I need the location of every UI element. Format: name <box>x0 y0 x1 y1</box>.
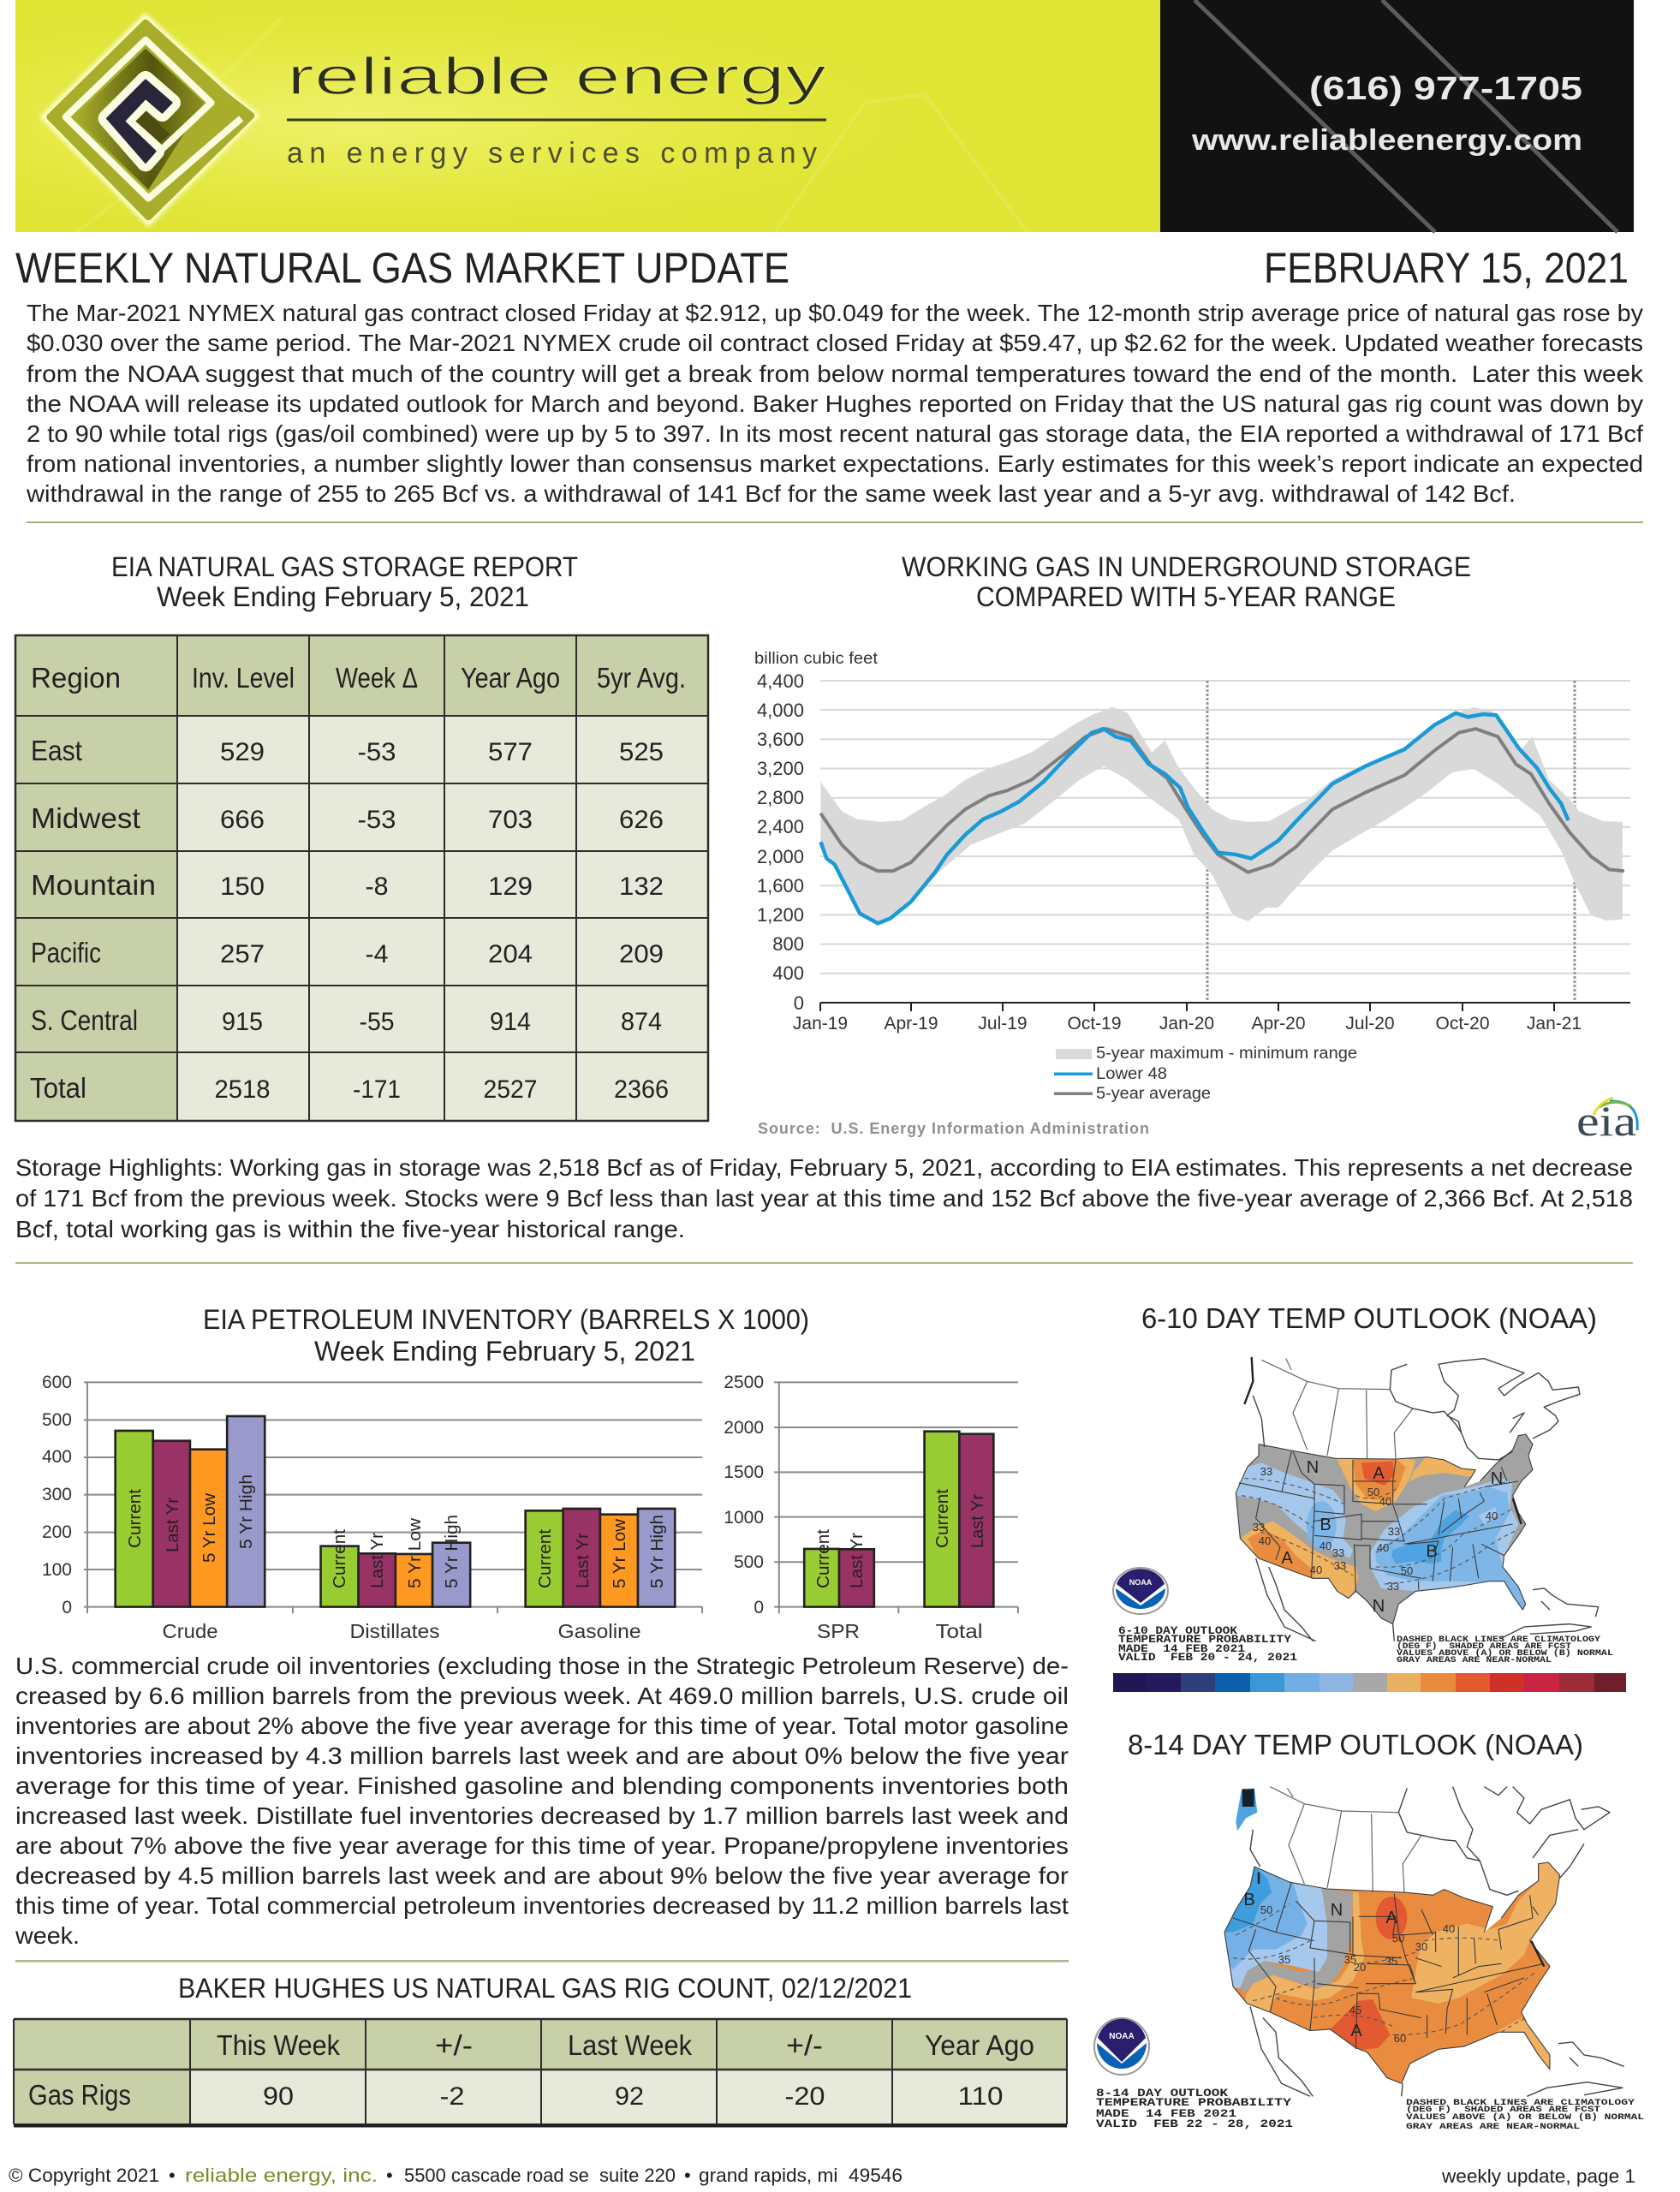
map caption left: TEMPERATURE PROBABILITY <box>1118 1634 1292 1646</box>
left y axis labels: 100 <box>42 1560 72 1580</box>
map caption left: VALID FEB 22 - 28, 2021 <box>1096 2118 1293 2130</box>
row: Total: 2366 <box>614 1075 669 1104</box>
map caption right: GRAY AREAS ARE NEAR-NORMAL <box>1406 2122 1580 2132</box>
map labels: N <box>1307 1458 1319 1477</box>
map caption right: GRAY AREAS ARE NEAR-NORMAL <box>1397 1655 1552 1665</box>
bar labels: Current <box>814 1529 833 1588</box>
map labels: 35 <box>1344 1953 1356 1966</box>
Lower 48 line <box>820 713 1569 923</box>
rig count table <box>14 2019 1067 2127</box>
left y axis labels: 500 <box>42 1410 72 1430</box>
rig table row <box>28 2079 1004 2111</box>
storage highlights: Storage Highlights: Working gas in storage was 2,518 Bcf as of Friday, February 5, 2021, according to EIA estimates. This represents a net decrease <box>15 1154 1633 1181</box>
storage report heading: EIA NATURAL GAS STORAGE REPORT <box>111 551 578 582</box>
icon: NOAA logo: NOAA <box>1129 1578 1153 1587</box>
y axis labels: 400 <box>772 962 804 984</box>
right y axis labels: 0 <box>754 1598 764 1617</box>
row: East <box>31 735 664 766</box>
footer <box>9 2165 1635 2187</box>
category labels: SPR <box>817 1620 860 1642</box>
icon: eia logo: eia <box>1576 1097 1636 1145</box>
map: 6-10 day outlook <box>1113 1357 1626 1692</box>
intro paragraph: $0.030 over the same period. The Mar-2021 NYMEX crude oil contract closed Friday at $59.47, up $2.62 for the week. Updated weather forecasts <box>27 330 1643 356</box>
bar labels: 5 Yr High <box>237 1474 256 1549</box>
row: Total <box>30 1072 669 1104</box>
phone: (616) 977-1705 <box>1309 71 1582 107</box>
row: East: 577 <box>488 738 533 766</box>
storage report heading: Week Ending February 5, 2021 <box>157 581 529 612</box>
left y axis labels: 600 <box>42 1373 72 1392</box>
y axis labels: 2,400 <box>757 816 804 837</box>
petroleum heading: Week Ending February 5, 2021 <box>314 1336 695 1367</box>
rig table row: -2 <box>440 2082 464 2111</box>
storage report heading <box>111 551 578 612</box>
category labels: Gasoline <box>558 1620 640 1642</box>
rig table row: Gas Rigs <box>28 2079 131 2111</box>
banner yellow panel <box>15 0 1160 232</box>
map caption right: (DEG F) SHADED AREAS ARE FCST <box>1397 1641 1571 1652</box>
petroleum paragraph: decreased by 4.5 million barrels last week and are about 9% below the five year average for <box>15 1862 1069 1889</box>
row: Midwest <box>31 802 664 834</box>
map caption left: 8-14 DAY OUTLOOK <box>1096 2088 1229 2100</box>
map labels: 50 <box>1260 1903 1272 1916</box>
working gas heading: WORKING GAS IN UNDERGROUND STORAGE <box>902 551 1471 582</box>
rig table header: This Week <box>217 2029 340 2061</box>
x axis labels: Jan-20 <box>1159 1014 1214 1033</box>
map labels: 50 <box>1401 1564 1413 1577</box>
y axis labels: 3,600 <box>757 729 804 750</box>
y axis labels: 4,000 <box>757 700 804 721</box>
left y axis labels: 0 <box>62 1598 72 1617</box>
row: East: 529 <box>220 738 265 766</box>
rig count heading: BAKER HUGHES US NATURAL GAS RIG COUNT, 02/12/2021 <box>178 1973 912 2004</box>
icon: NOAA logo: NOAA <box>1109 2032 1135 2041</box>
bar labels: Current <box>126 1489 145 1548</box>
right y axis labels: 1000 <box>724 1508 764 1528</box>
table header row: Region <box>31 662 121 694</box>
map caption left: MADE 14 FEB 2021 <box>1096 2108 1236 2120</box>
row: Midwest: 666 <box>220 806 265 834</box>
category labels: Distillates <box>349 1620 440 1642</box>
footer: • <box>169 2165 176 2186</box>
petroleum paragraph: are about 7% above the five year average for this time of year. Propane/propylene inventories <box>15 1832 1069 1859</box>
storage highlights: Bcf, total working gas is within the five-year historical range. <box>15 1216 685 1242</box>
map labels: 40 <box>1320 1540 1331 1552</box>
bar labels: 5 Yr Low <box>200 1492 219 1563</box>
icon: NOAA logo <box>1094 2018 1149 2075</box>
row: S. Central: S. Central <box>31 1004 138 1036</box>
y axis labels: 1,600 <box>757 875 804 896</box>
map caption left: 6-10 DAY OUTLOOK <box>1118 1625 1238 1637</box>
row: Pacific: Pacific <box>31 937 101 968</box>
y axis labels <box>757 670 804 1014</box>
petroleum paragraph <box>15 1653 1069 1949</box>
row: Mountain: 150 <box>220 873 265 901</box>
x axis labels: Jan-21 <box>1527 1014 1582 1033</box>
map labels <box>1253 1458 1503 1616</box>
gasoline bars <box>526 1509 675 1607</box>
map labels: 33 <box>1387 1580 1399 1593</box>
source: Source: U.S. Energy Information Administration <box>758 1120 1149 1137</box>
storage table <box>15 635 708 1121</box>
map labels: 40 <box>1377 1541 1389 1554</box>
map caption left: TEMPERATURE PROBABILITY <box>1096 2097 1292 2109</box>
petroleum paragraph: inventories are about 2% above the five year average for this time of year. Total motor gasoline <box>15 1712 1069 1739</box>
rig table header: Last Week <box>568 2029 692 2061</box>
legend: 5-year maximum - minimum range <box>1096 1045 1357 1063</box>
left y axis labels: 400 <box>42 1447 72 1467</box>
map labels: N <box>1373 1597 1385 1616</box>
bar labels: Last Yr <box>848 1533 867 1588</box>
map labels: B <box>1320 1516 1331 1534</box>
x axis labels: Apr-20 <box>1251 1014 1306 1033</box>
footer: 5500 cascade road se suite 220 <box>404 2165 676 2186</box>
bar labels: Last Yr <box>164 1498 182 1552</box>
petroleum paragraph: week. <box>15 1922 80 1949</box>
left y axis labels: 200 <box>42 1522 72 1542</box>
footer: grand rapids, mi 49546 <box>699 2165 903 2186</box>
right y axis labels: 500 <box>734 1552 764 1572</box>
rig table header: Year Ago <box>925 2029 1034 2061</box>
x axis labels: Oct-19 <box>1067 1014 1122 1033</box>
row: Mountain <box>31 869 664 901</box>
x axis labels: Jul-19 <box>978 1014 1028 1033</box>
petroleum paragraph: inventories increased by 4.3 million barrels last week and are about 0% below the five year <box>15 1742 1069 1769</box>
rig table header: +/- <box>435 2029 473 2061</box>
x axis labels: Jan-19 <box>793 1014 848 1033</box>
map labels: 20 <box>1354 1961 1366 1974</box>
row: Midwest: 626 <box>619 806 664 834</box>
map labels: A <box>1350 2022 1362 2040</box>
map labels: A <box>1385 1909 1397 1927</box>
map labels: 40 <box>1443 1922 1455 1935</box>
petroleum paragraph: increased last week. Distillate fuel inventories decreased by 1.7 million barrels last week and <box>15 1802 1069 1829</box>
right y axis labels: 2500 <box>724 1373 764 1392</box>
row: Total: 2518 <box>214 1075 271 1104</box>
map linework <box>1236 1357 1599 1641</box>
bar labels: 5 Yr High <box>648 1515 667 1588</box>
intro paragraph: from national inventories, a number slightly lower than consensus market expectations. Early estimates for this week’s report indicate an expected <box>27 450 1643 477</box>
petroleum heading <box>203 1304 809 1367</box>
date: FEBRUARY 15, 2021 <box>1264 244 1629 292</box>
map: 8-14 day outlook <box>1094 1787 1644 2132</box>
right y axis labels: 1500 <box>724 1462 764 1482</box>
y axis labels: 3,200 <box>757 758 804 779</box>
map caption right: VALUES ABOVE (A) OR BELOW (B) NORMAL <box>1406 2112 1644 2123</box>
legend: Lower 48 <box>1096 1065 1167 1083</box>
footer: • <box>386 2165 393 2186</box>
legend: 5-year average <box>1096 1085 1211 1103</box>
map labels: 40 <box>1379 1495 1391 1508</box>
icon: NOAA logo <box>1113 1568 1168 1614</box>
bar labels: Current <box>331 1529 349 1588</box>
row: Pacific: -4 <box>365 940 389 968</box>
row: S. Central: -55 <box>360 1008 394 1036</box>
y axis labels: 4,400 <box>757 670 804 692</box>
map labels: 40 <box>1259 1534 1271 1547</box>
map labels: 33 <box>1253 1521 1265 1534</box>
left y axis labels: 300 <box>42 1485 72 1504</box>
footer: © Copyright 2021 <box>9 2165 159 2186</box>
map caption right: (DEG F) SHADED AREAS ARE FCST <box>1406 2105 1600 2115</box>
map labels: 33 <box>1332 1546 1344 1559</box>
map labels: 40 <box>1486 1510 1498 1522</box>
map caption right: VALUES ABOVE (A) OR BELOW (B) NORMAL <box>1397 1648 1613 1659</box>
map labels: B <box>1243 1891 1255 1909</box>
category labels: Total <box>935 1620 983 1642</box>
row: S. Central <box>31 1004 662 1036</box>
6-10 day heading: 6-10 DAY TEMP OUTLOOK (NOAA) <box>1141 1302 1597 1334</box>
5-year average line <box>820 729 1624 873</box>
map labels: 50 <box>1367 1486 1379 1498</box>
x axis labels: Jul-20 <box>1345 1014 1395 1033</box>
intro paragraph: The Mar-2021 NYMEX natural gas contract closed Friday at $2.912, up $0.049 for the week. The 12-month strip average price of natural gas rose by <box>27 300 1643 326</box>
line chart: working gas <box>754 650 1637 1145</box>
bar labels <box>126 1474 987 1588</box>
bar labels: 5 Yr High <box>443 1515 462 1588</box>
y axis labels: 0 <box>794 992 804 1014</box>
map caption right <box>1406 2098 1644 2132</box>
grid and axes <box>820 681 1630 1003</box>
row: Mountain: Mountain <box>31 869 156 901</box>
row: East: East <box>31 735 82 766</box>
map caption left: VALID FEB 20 - 24, 2021 <box>1118 1652 1297 1664</box>
5-year range band <box>820 707 1623 923</box>
right y axis labels <box>724 1373 764 1617</box>
company name: reliable energy <box>287 47 827 105</box>
map shading <box>1236 1435 1533 1623</box>
map labels: 35 <box>1278 1953 1290 1966</box>
map caption left <box>1096 2088 1293 2130</box>
table header row <box>31 662 686 694</box>
storage highlights <box>15 1154 1633 1242</box>
footer: • <box>684 2165 691 2186</box>
map caption left <box>1118 1625 1297 1664</box>
rig table header: +/- <box>786 2029 823 2061</box>
row: Mountain: 132 <box>619 873 664 901</box>
bar labels: Current <box>536 1529 555 1588</box>
row: Midwest: 703 <box>488 806 533 834</box>
row: Pacific: 257 <box>220 940 265 968</box>
series drawn in chart space <box>820 707 1624 923</box>
row: Total: 2527 <box>483 1075 538 1104</box>
rig table row: -20 <box>784 2082 825 2111</box>
table header row: 5yr Avg. <box>597 662 686 694</box>
row: Mountain: 129 <box>488 873 533 901</box>
rig table row: 90 <box>263 2082 294 2111</box>
bar chart: petroleum inventory <box>42 1373 1018 1642</box>
bar labels: 5 Yr Low <box>611 1518 629 1588</box>
petroleum heading: EIA PETROLEUM INVENTORY (BARRELS X 1000) <box>203 1304 809 1335</box>
rig table row: 92 <box>615 2082 644 2111</box>
bar labels: Last Yr <box>968 1494 987 1548</box>
map labels: 33 <box>1260 1465 1272 1478</box>
map labels: 35 <box>1385 1955 1397 1968</box>
intro paragraph: 2 to 90 while total rigs (gas/oil combined) were up by 5 to 397. In its most recent natural gas storage data, the EIA reported a withdrawal of 171 Bcf <box>27 420 1643 447</box>
distillates bars <box>321 1543 470 1607</box>
color scale bar <box>1113 1673 1626 1692</box>
intro paragraph: withdrawal in the range of 255 to 265 Bcf vs. a withdrawal of 141 Bcf for the same week last year and a 5-yr avg. withdrawal of 142 Bcf. <box>26 480 1516 507</box>
storage highlights: of 171 Bcf from the previous week. Stocks were 9 Bcf less than last year at this time and 152 Bcf above the five-year average of 2,366 Bcf. At 2,518 <box>15 1185 1633 1212</box>
petroleum paragraph: U.S. commercial crude oil inventories (excluding those in the Strategic Petroleum Reserve) de- <box>15 1653 1069 1679</box>
map linework <box>1224 1787 1624 2096</box>
grid lines <box>84 1382 1018 1613</box>
row: East: 525 <box>619 738 664 766</box>
row: S. Central: 914 <box>490 1008 531 1036</box>
map caption right <box>1397 1635 1613 1665</box>
row: S. Central: 915 <box>222 1008 263 1036</box>
total bars <box>925 1432 993 1607</box>
y axis labels: 2,800 <box>757 787 804 808</box>
row: Total: Total <box>30 1072 86 1104</box>
footer: reliable energy, inc. <box>185 2165 378 2186</box>
bar labels: 5 Yr Low <box>406 1517 425 1588</box>
map labels: 40 <box>1310 1564 1322 1576</box>
legend <box>1054 1045 1357 1103</box>
x axis labels <box>793 1014 1582 1033</box>
map labels: 33 <box>1334 1559 1346 1572</box>
row: Mountain: -8 <box>365 873 389 901</box>
row: Midwest: Midwest <box>31 802 140 834</box>
category labels: Crude <box>163 1620 217 1642</box>
map labels: B <box>1426 1542 1438 1561</box>
map caption right: DASHED BLACK LINES ARE CLIMATOLOGY <box>1406 2098 1635 2108</box>
petroleum paragraph: this time of year. Total commercial petroleum inventories decreased by 11.2 million barrels last <box>15 1892 1069 1919</box>
bar labels: Last Yr <box>368 1533 387 1588</box>
logo rule <box>287 118 826 122</box>
map labels: 33 <box>1388 1525 1400 1538</box>
tagline: an energy services company <box>287 137 817 170</box>
map labels: A <box>1373 1464 1385 1483</box>
row: Pacific: 209 <box>619 940 664 968</box>
working gas heading <box>902 551 1471 612</box>
petroleum paragraph: creased by 6.6 million barrels from the previous week. At 469.0 million barrels, U.S. crude oil <box>15 1683 1069 1709</box>
left y axis labels <box>42 1373 72 1617</box>
8-14 day heading: 8-14 DAY TEMP OUTLOOK (NOAA) <box>1128 1729 1583 1760</box>
map labels: 50 <box>1392 1932 1404 1945</box>
map labels <box>1243 1891 1455 2045</box>
y axis labels: 1,200 <box>757 904 804 926</box>
map labels: 60 <box>1394 2032 1406 2045</box>
row: Total: -171 <box>353 1075 401 1104</box>
rig table header <box>217 2029 1034 2061</box>
x axis labels: Oct-20 <box>1435 1014 1490 1033</box>
table header row: Week Δ <box>336 662 418 694</box>
map labels: 30 <box>1415 1940 1427 1953</box>
footer: weekly update, page 1 <box>1441 2165 1635 2187</box>
row: Pacific: 204 <box>488 940 533 968</box>
map shading <box>1218 1858 1567 2089</box>
header banner <box>15 0 1634 232</box>
intro paragraph: the NOAA will release its updated outlook for March and beyond. Baker Hughes reported on Friday that the US natural gas rig count was down by <box>27 390 1643 417</box>
y axis labels: 2,000 <box>757 846 804 867</box>
logo diamond <box>45 19 254 221</box>
working gas heading: COMPARED WITH 5-YEAR RANGE <box>976 581 1396 612</box>
row: Pacific <box>31 937 664 968</box>
row: S. Central: 874 <box>621 1008 662 1036</box>
bar labels: Current <box>933 1489 952 1548</box>
rig table row: 110 <box>957 2082 1004 2111</box>
chart geometry <box>84 1382 1018 1613</box>
row: Midwest: -53 <box>358 806 396 834</box>
row: East: -53 <box>358 738 396 766</box>
map labels: 45 <box>1349 2004 1361 2016</box>
x axis labels: Apr-19 <box>884 1014 938 1033</box>
petroleum paragraph: average for this time of year. Finished gasoline and blending components inventories both <box>15 1772 1069 1799</box>
map labels: A <box>1281 1549 1293 1568</box>
map labels: N <box>1331 1901 1343 1920</box>
banner black panel <box>1160 0 1634 232</box>
map labels: N <box>1491 1469 1503 1488</box>
y axis labels: 800 <box>772 933 804 955</box>
table header row: Inv. Level <box>192 662 295 694</box>
SPR bars <box>804 1549 874 1607</box>
category labels <box>163 1620 983 1642</box>
map caption right: DASHED BLACK LINES ARE CLIMATOLOGY <box>1397 1635 1601 1645</box>
bar labels: Last Yr <box>574 1533 593 1588</box>
title: WEEKLY NATURAL GAS MARKET UPDATE <box>15 244 789 292</box>
map caption left: MADE 14 FEB 2021 <box>1118 1643 1245 1655</box>
table header row: Year Ago <box>461 662 560 694</box>
website: www.reliableenergy.com <box>1191 124 1582 157</box>
y axis unit: billion cubic feet <box>754 650 879 668</box>
intro paragraph <box>26 300 1644 507</box>
intro paragraph: from the NOAA suggest that much of the country will get a break from below normal temperatures toward the end of the month. Later this week <box>27 360 1644 387</box>
crude bars <box>116 1416 265 1607</box>
right y axis labels: 2000 <box>724 1418 764 1438</box>
